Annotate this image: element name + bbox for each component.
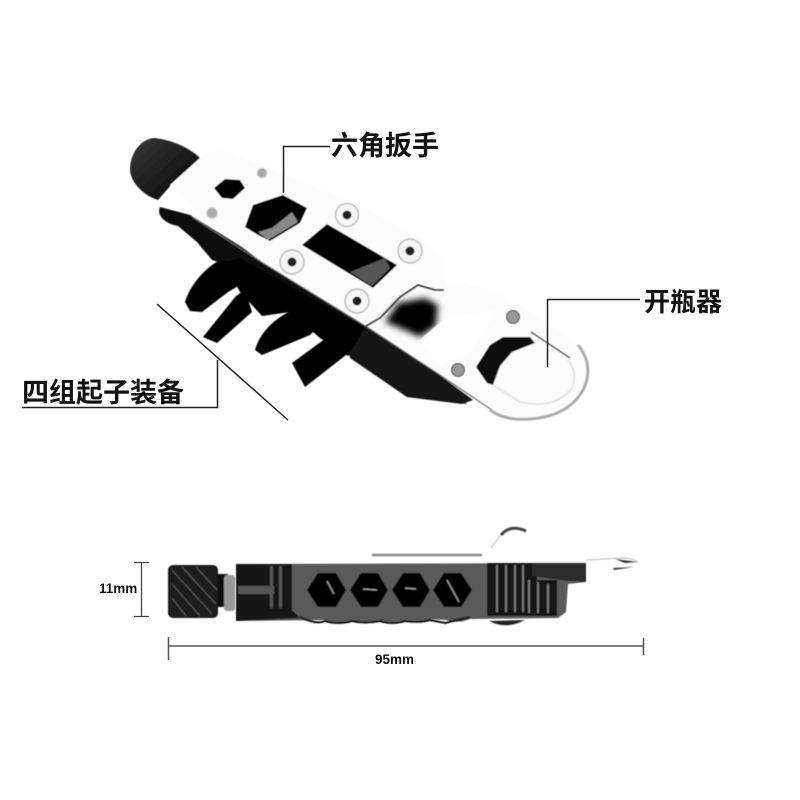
large hex hole <box>245 195 307 241</box>
bit 4 <box>292 333 348 387</box>
side view tool <box>168 528 638 625</box>
opening outline <box>493 360 574 404</box>
leader line <box>284 146 330 193</box>
leader line <box>548 300 640 367</box>
small hex hole <box>214 179 245 199</box>
spring arm <box>491 532 503 548</box>
right ribs <box>487 563 557 616</box>
neck <box>218 574 228 607</box>
bottle opener hole <box>476 337 535 385</box>
bit carrier <box>224 258 365 356</box>
bit glyphs <box>327 580 459 602</box>
bit 2 <box>203 290 252 343</box>
opener hook line <box>531 332 570 358</box>
screw heads <box>288 210 414 306</box>
textured body side <box>345 325 473 404</box>
label: 六角扳手 <box>331 131 439 161</box>
bracket <box>168 637 644 660</box>
body <box>236 563 586 622</box>
white label patch <box>420 310 497 365</box>
value: 95mm <box>375 652 414 667</box>
screws <box>280 204 422 313</box>
body lower shadow <box>300 617 470 623</box>
knurl lines <box>172 567 217 616</box>
knurled knob <box>168 565 218 618</box>
callout: hex wrench <box>284 131 439 193</box>
plate joint <box>366 285 444 326</box>
left ribbed section <box>236 564 300 621</box>
value: 11mm <box>99 581 137 596</box>
hex sockets <box>307 573 472 607</box>
callout: bottle opener <box>548 287 722 367</box>
knob <box>130 138 200 200</box>
label: 开瓶器 <box>644 287 722 317</box>
key ring <box>586 558 638 562</box>
bit 1 <box>185 260 240 312</box>
dimension: height <box>99 562 149 616</box>
dimension: length <box>168 637 644 667</box>
top clip <box>372 554 482 556</box>
label: 四组起子装备 <box>22 378 184 408</box>
bit 3 <box>255 310 325 355</box>
multi-tool, angled view <box>130 138 589 419</box>
right end cap <box>532 563 586 582</box>
callout: four driver bits <box>22 304 288 420</box>
rivets <box>257 168 267 178</box>
bracket <box>134 562 149 616</box>
rectangular slot <box>302 224 397 288</box>
plate lower edge <box>192 217 492 410</box>
center cut-out shadow <box>385 298 438 337</box>
lower thumb stud <box>489 620 525 625</box>
opener rim shadow <box>490 345 588 419</box>
leader line <box>22 360 218 408</box>
driver bits <box>185 258 365 387</box>
steel plate <box>170 151 589 418</box>
bracket line <box>157 304 288 420</box>
black body behind plate <box>159 207 467 404</box>
